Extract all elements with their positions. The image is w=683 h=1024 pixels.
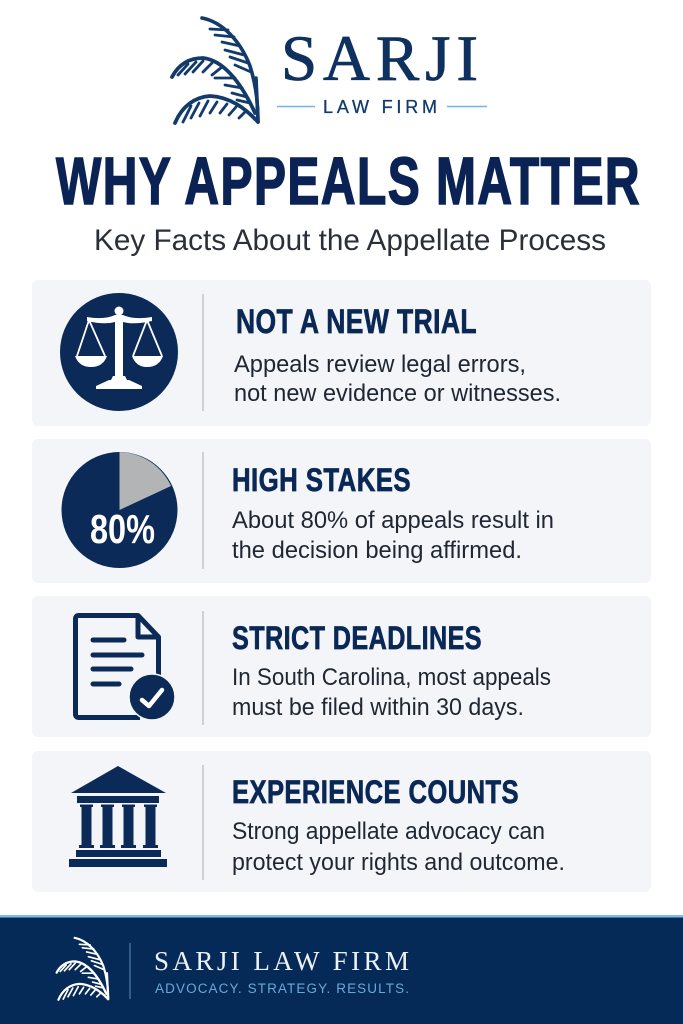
- panel: experience counts: [32, 751, 651, 892]
- footer firm name: SARJI LAW FIRM: [154, 946, 409, 976]
- heading: STRICT DEADLINES: [232, 620, 482, 656]
- panel: strict deadlines: [32, 596, 651, 737]
- icon: document with check: [76, 616, 175, 720]
- heading: HIGH STAKES: [232, 462, 411, 498]
- description: [232, 664, 551, 721]
- description: [232, 507, 554, 564]
- icon: scales of justice: [60, 293, 178, 411]
- heading: EXPERIENCE COUNTS: [232, 774, 519, 810]
- description: the decision being affirmed.: [232, 537, 522, 564]
- heading: NOT A NEW TRIAL: [236, 303, 477, 341]
- description: [234, 351, 561, 407]
- description: About 80% of appeals result in: [232, 507, 554, 534]
- chart: 80% pie: 80%: [90, 506, 155, 552]
- description: [232, 818, 565, 876]
- footer: [0, 915, 683, 1024]
- icon: white palm frond: [57, 938, 108, 1000]
- logo subtitle with rules: LAW FIRM: [323, 97, 437, 117]
- description: protect your rights and outcome.: [232, 849, 565, 876]
- icon: palm frond: [172, 18, 258, 123]
- logo wordmark: SARJI: [281, 23, 478, 95]
- footer tagline: ADVOCACY. STRATEGY. RESULTS.: [155, 981, 409, 996]
- icon: courthouse: [69, 766, 167, 867]
- description: must be filed within 30 days.: [232, 694, 524, 721]
- description: not new evidence or witnesses.: [234, 380, 561, 407]
- subtitle: Key Facts About the Appellate Process: [94, 224, 606, 257]
- chart: 80% pie: [62, 452, 178, 568]
- description: In South Carolina, most appeals: [232, 664, 551, 691]
- description: Strong appellate advocacy can: [232, 818, 545, 845]
- logo: Sarji Law Firm: [172, 18, 487, 123]
- panel: not a new trial: [32, 280, 651, 426]
- panel: high stakes: [32, 439, 651, 583]
- description: Appeals review legal errors,: [234, 351, 526, 378]
